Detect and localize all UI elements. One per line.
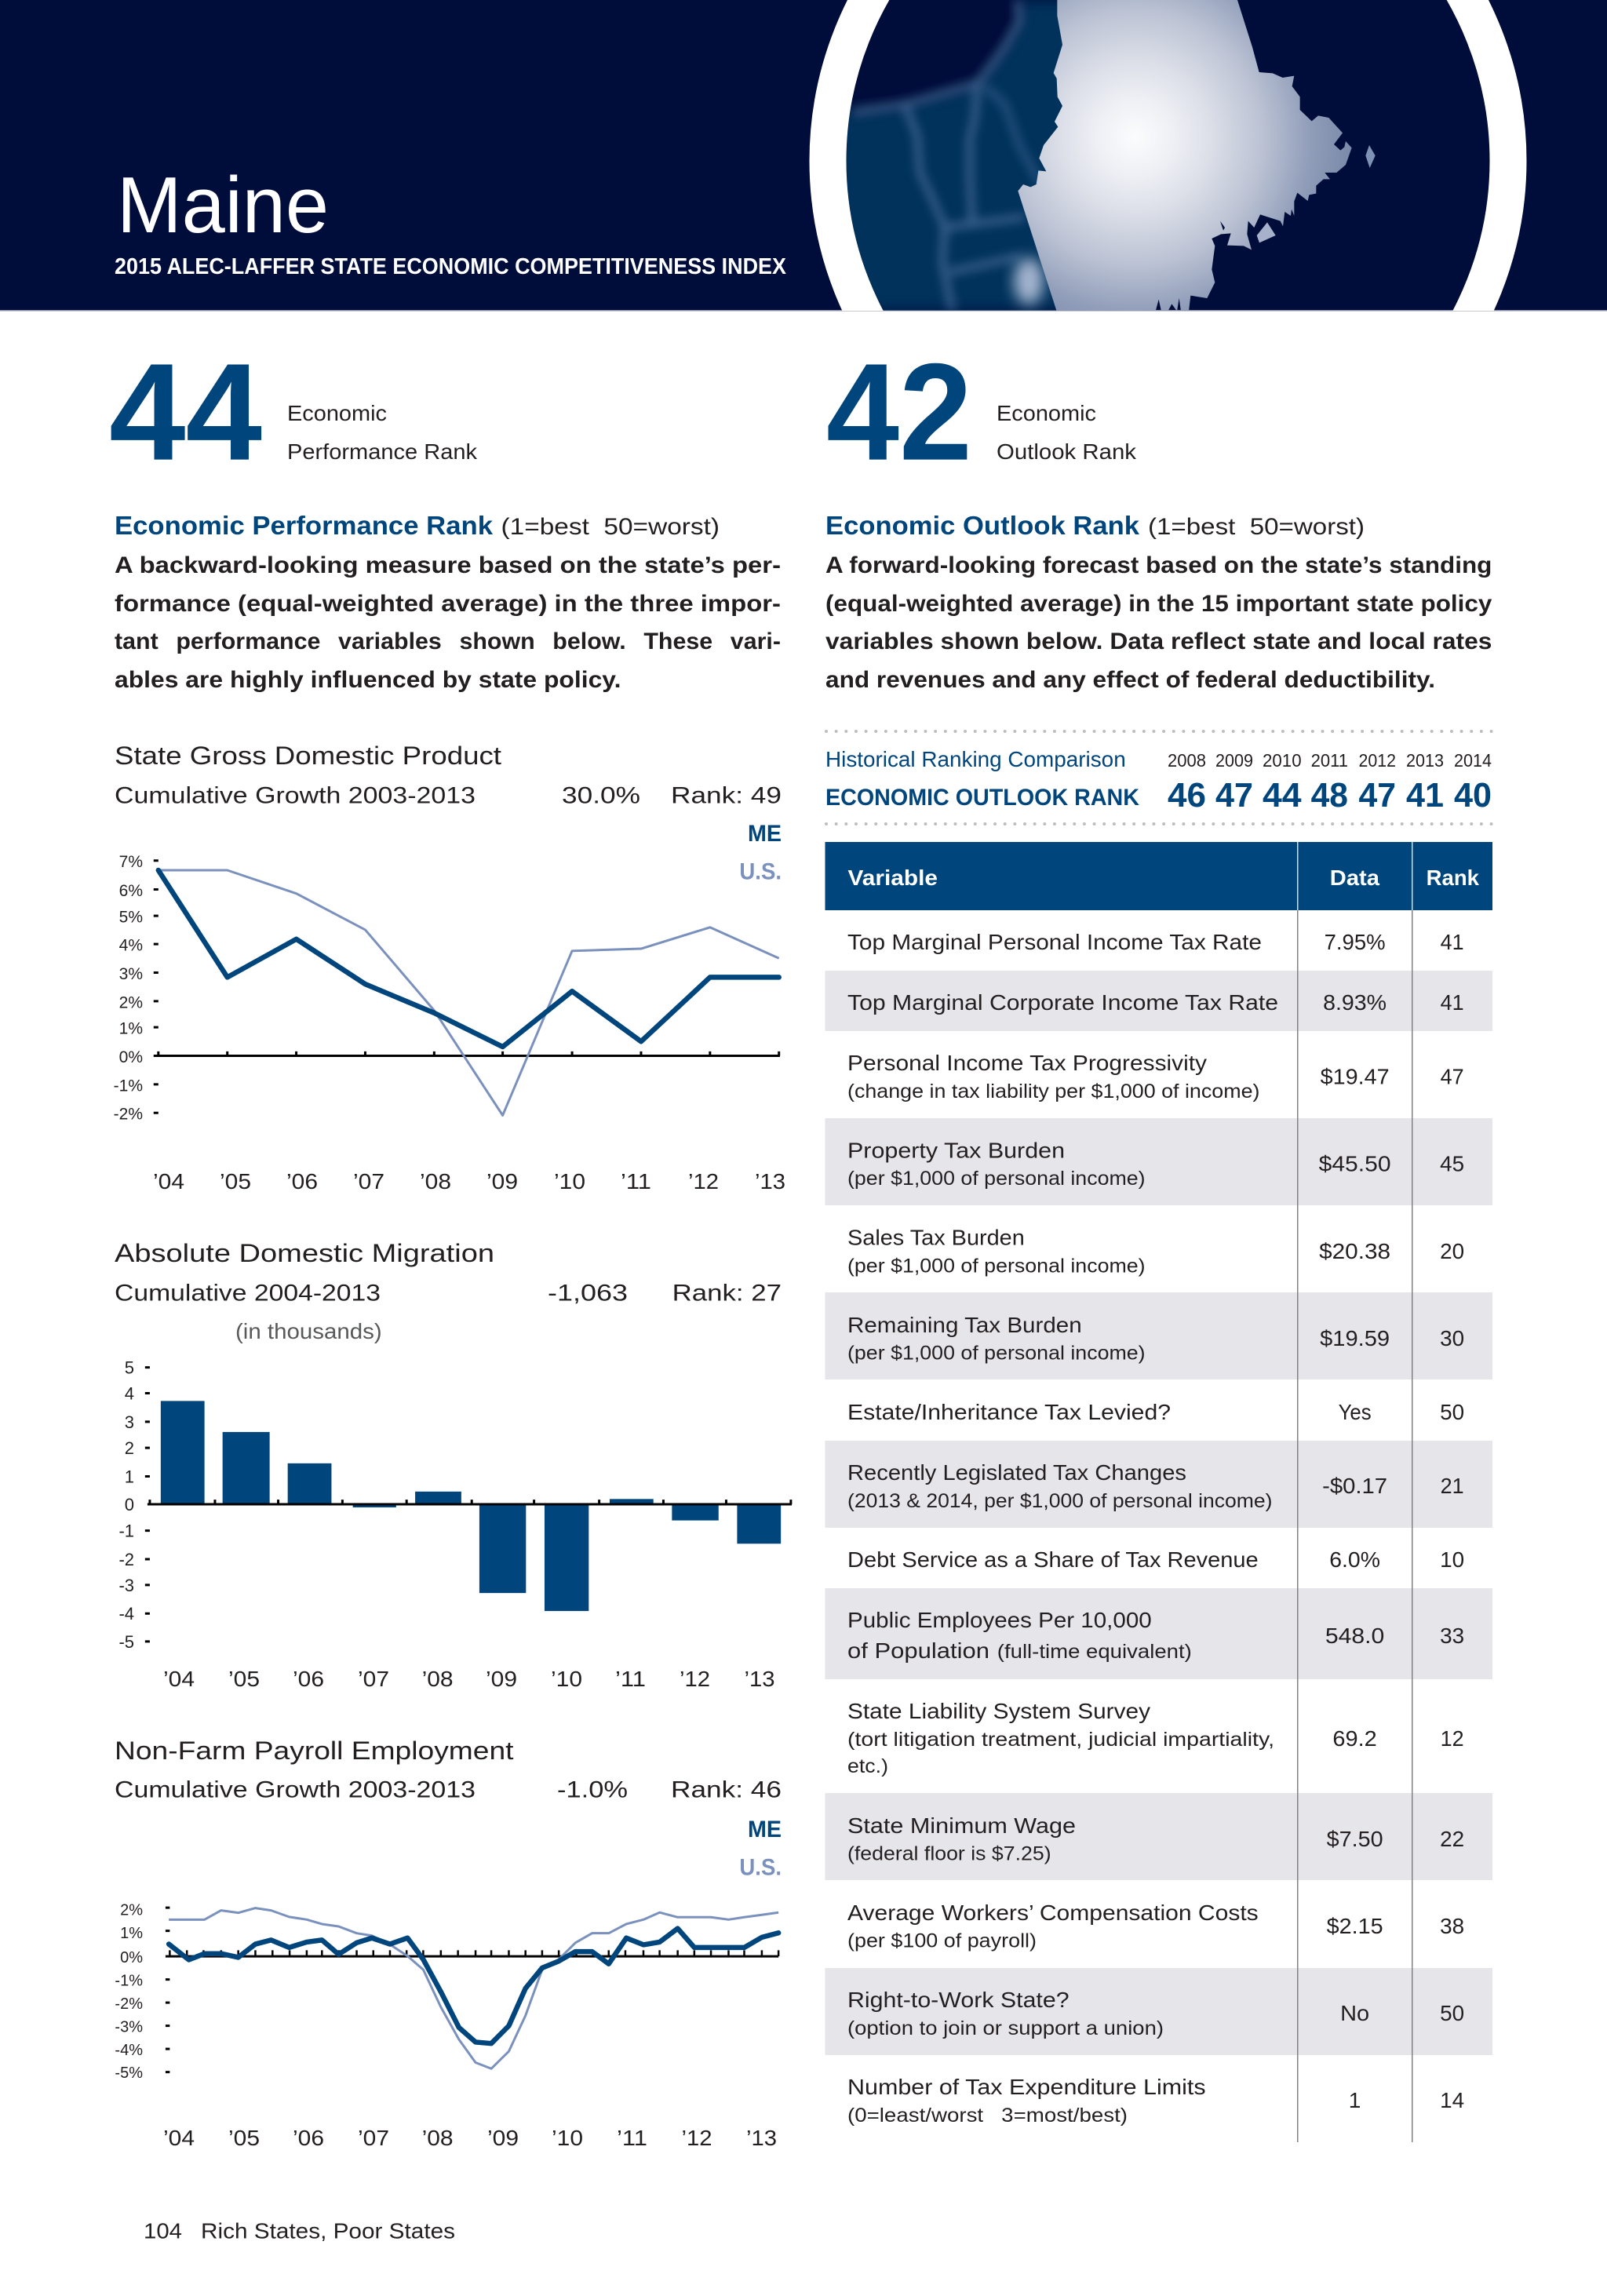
years: 2008 (1168, 750, 1206, 771)
bar chart: migration (118, 1358, 792, 1691)
chart heading: 30.0% (562, 783, 640, 808)
bar chart: migration: ’12 (680, 1667, 710, 1691)
row: debt service (847, 1547, 1464, 1572)
years: 2010 (1263, 750, 1302, 771)
bar chart: migration: -3 (118, 1576, 134, 1595)
big rank number 42: 42 (826, 336, 972, 490)
heading: (1=best 50=worst) (501, 514, 720, 540)
row: average workers' compensation costs: Average Workers’ Compensation Costs (847, 1901, 1259, 1925)
description: and revenues and any effect of federal deductibility. (825, 667, 1435, 693)
bar chart: migration: 2 (125, 1438, 134, 1458)
row: number of tax expenditure limits: (0=least/worst 3=most/best) (847, 2105, 1128, 2127)
row: state minimum wage (847, 1813, 1464, 1865)
bar chart: migration: ’08 (422, 1667, 454, 1691)
bar chart: migration: ’07 (358, 1667, 389, 1691)
row: top marginal corporate income tax rate (847, 990, 1464, 1015)
line chart: employment: ’08 (422, 2126, 454, 2150)
line chart: GDP growth: 4% (119, 937, 143, 954)
row: personal income tax progressivity: $19.47 (1321, 1065, 1390, 1089)
heading: Economic Performance Rank (115, 511, 494, 540)
row: personal income tax progressivity: Personal Income Tax Progressivity (847, 1051, 1207, 1075)
row: state liability system survey (847, 1699, 1464, 1777)
line chart: GDP growth: 6% (119, 882, 143, 900)
bar chart: migration: ’09 (486, 1667, 517, 1691)
row: top marginal personal income tax rate: 7.95% (1325, 930, 1386, 954)
line chart: employment: ’07 (358, 2126, 389, 2150)
row: top marginal personal income tax rate: Top Marginal Personal Income Tax Rate (847, 930, 1262, 954)
bar chart: migration: ’10 (551, 1667, 582, 1691)
title: Maine (117, 162, 329, 250)
row: number of tax expenditure limits: Number of Tax Expenditure Limits (847, 2075, 1206, 2099)
row: recently legislated tax changes: 21 (1441, 1474, 1464, 1498)
description: formance (equal-weighted average) in the three impor- (115, 591, 781, 617)
line chart: GDP growth: -1% (114, 1077, 143, 1095)
panel: non-farm payroll employment (115, 1737, 782, 2150)
table header: Variable (847, 866, 938, 890)
bar chart: migration: 4 (125, 1384, 134, 1403)
line chart: employment: ’13 (746, 2126, 777, 2150)
chart heading (115, 1737, 782, 1803)
line chart: GDP growth: ’11 (621, 1169, 651, 1194)
rank label (997, 401, 1137, 464)
table header (825, 842, 1492, 910)
heading (825, 511, 1365, 540)
panel: economic outlook rank (825, 336, 1492, 693)
bar chart: migration: ’04 (163, 1667, 195, 1691)
historical ranks: 47 (1215, 776, 1253, 815)
line chart: GDP growth: 0% (119, 1048, 143, 1066)
row: property tax burden: Property Tax Burden (847, 1139, 1065, 1163)
description: tant performance variables shown below. These vari- (115, 629, 781, 654)
historical ranks: 46 (1168, 776, 1206, 815)
legend: ME (748, 1817, 782, 1842)
historical ranks: 41 (1406, 776, 1444, 815)
line chart: GDP growth: ’09 (486, 1169, 518, 1194)
row: average workers' compensation costs: (per $100 of payroll) (847, 1930, 1037, 1952)
historical ranks: 44 (1263, 776, 1302, 815)
description: ables are highly influenced by state policy. (115, 667, 621, 693)
description (115, 552, 781, 693)
row: state liability system survey: (tort litigation treatment, judicial impartiality, (847, 1729, 1274, 1751)
bar chart: migration: 0 (125, 1495, 134, 1514)
line chart: employment: ’12 (681, 2126, 712, 2150)
row: sales tax burden (847, 1226, 1464, 1277)
row: top marginal personal income tax rate (847, 930, 1464, 954)
row: personal income tax progressivity: (change in tax liability per $1,000 of income) (847, 1081, 1260, 1102)
line chart: GDP growth: ’12 (688, 1169, 719, 1194)
chart heading: Rank: 46 (671, 1777, 782, 1803)
legend: U.S. (739, 1855, 782, 1880)
table: policy variables (825, 842, 1492, 2142)
footer page label: Rich States, Poor States (201, 2219, 455, 2243)
line chart: employment: ’05 (228, 2126, 260, 2150)
line chart: GDP growth: ’06 (286, 1169, 318, 1194)
row: average workers' compensation costs: 38 (1440, 1914, 1464, 1938)
chart heading: Absolute Domestic Migration (115, 1239, 494, 1267)
row: state liability system survey: State Liability System Survey (847, 1699, 1150, 1723)
description: variables shown below. Data reflect state and local rates (825, 629, 1492, 654)
row: number of tax expenditure limits: 14 (1440, 2088, 1464, 2112)
years: 2011 (1311, 750, 1348, 771)
line chart: GDP growth: ’13 (755, 1169, 785, 1194)
row: recently legislated tax changes (847, 1460, 1464, 1512)
row: sales tax burden: Sales Tax Burden (847, 1226, 1025, 1250)
historical ranks: 47 (1359, 776, 1396, 815)
row: right-to-work state: Right-to-Work State? (847, 1988, 1070, 2012)
row: right-to-work state: No (1340, 2001, 1369, 2025)
row: remaining tax burden: Remaining Tax Burden (847, 1313, 1082, 1337)
chart heading: State Gross Domestic Product (115, 742, 501, 770)
chart heading: Non-Farm Payroll Employment (115, 1737, 513, 1765)
row: state liability system survey: 69.2 (1332, 1726, 1377, 1751)
unit note: (in thousands) (235, 1319, 382, 1343)
row: public employees: 33 (1440, 1624, 1464, 1648)
legend: ME (748, 821, 782, 847)
line chart: employment: -1% (115, 1973, 143, 1990)
years: 2012 (1359, 750, 1396, 771)
line chart: GDP growth: 3% (119, 965, 143, 983)
rank label: Economic (997, 401, 1096, 425)
bar chart: migration: -2 (118, 1550, 134, 1569)
chart heading: Rank: 27 (672, 1281, 782, 1306)
chart heading (115, 742, 782, 808)
rank label: Outlook Rank (997, 439, 1137, 464)
row: right-to-work state (847, 1988, 1464, 2039)
historical ranks: 40 (1454, 776, 1492, 815)
bar chart: migration: -1 (118, 1521, 134, 1541)
line chart: employment: 2% (120, 1902, 143, 1919)
line chart: employment: 1% (120, 1925, 143, 1942)
table row backgrounds (825, 971, 1492, 2055)
line chart: employment: -5% (115, 2065, 143, 2082)
row: public employees: 548.0 (1325, 1624, 1384, 1648)
big rank number 44: 44 (109, 336, 262, 490)
row: number of tax expenditure limits (847, 2075, 1464, 2127)
chart heading: Cumulative 2004-2013 (115, 1281, 381, 1306)
line chart: employment: ’09 (487, 2126, 519, 2150)
row: debt service: 10 (1440, 1547, 1464, 1572)
legend (739, 821, 782, 885)
row: property tax burden: 45 (1440, 1152, 1464, 1176)
rank label (287, 401, 478, 464)
row: debt service: Debt Service as a Share of Tax Revenue (847, 1547, 1259, 1572)
row: property tax burden: (per $1,000 of personal income) (847, 1168, 1146, 1190)
heading: Economic Outlook Rank (825, 511, 1140, 540)
row: right-to-work state: 50 (1440, 2001, 1464, 2025)
row: top marginal corporate income tax rate: Top Marginal Corporate Income Tax Rate (847, 990, 1278, 1015)
panel: economic performance rank (109, 336, 781, 693)
description: (equal-weighted average) in the 15 important state policy (825, 591, 1492, 617)
map of Maine in a ring (810, 0, 1527, 311)
row: remaining tax burden: 30 (1440, 1326, 1464, 1350)
line chart: employment: -2% (115, 1995, 143, 2013)
table header: Rank (1427, 866, 1479, 890)
historical ranking comparison (825, 731, 1492, 824)
row: property tax burden (847, 1139, 1464, 1190)
line chart: GDP growth: 2% (119, 993, 143, 1012)
bar chart: migration: -5 (118, 1632, 134, 1652)
heading (115, 511, 720, 540)
row: average workers' compensation costs (847, 1901, 1464, 1952)
comparison label: Historical Ranking Comparison (825, 747, 1126, 771)
bar chart: migration: 1 (125, 1467, 134, 1486)
line chart: GDP growth: 1% (119, 1020, 143, 1037)
rank label: ECONOMIC OUTLOOK RANK (825, 785, 1139, 811)
years: 2013 (1406, 750, 1444, 771)
row: recently legislated tax changes: Recently Legislated Tax Changes (847, 1460, 1186, 1485)
row: property tax burden: $45.50 (1319, 1152, 1391, 1176)
years: 2009 (1215, 750, 1253, 771)
bar chart: migration: ’13 (744, 1667, 775, 1691)
rank label: Economic (287, 401, 387, 425)
chart heading: Cumulative Growth 2003-2013 (115, 1777, 476, 1803)
line chart: GDP growth: ’08 (420, 1169, 451, 1194)
row: public employees (847, 1608, 1464, 1663)
row: public employees: (full-time equivalent) (997, 1641, 1192, 1663)
row: top marginal corporate income tax rate: 8.93% (1323, 990, 1387, 1015)
line chart: GDP growth: -2% (114, 1105, 143, 1124)
row: recently legislated tax changes: (2013 & 2014, per $1,000 of personal income) (847, 1490, 1273, 1512)
row: state minimum wage: State Minimum Wage (847, 1813, 1076, 1838)
line chart: GDP growth: 5% (119, 909, 143, 926)
line chart: employment: ’11 (617, 2126, 647, 2150)
description (825, 552, 1492, 693)
historical ranks (1168, 776, 1492, 815)
row: top marginal personal income tax rate: 41 (1441, 930, 1464, 954)
chart heading: -1,063 (548, 1281, 628, 1306)
line chart: GDP growth: ’10 (554, 1169, 585, 1194)
row: number of tax expenditure limits: 1 (1349, 2088, 1361, 2112)
row: debt service: 6.0% (1329, 1547, 1380, 1572)
subtitle: 2015 ALEC-LAFFER STATE ECONOMIC COMPETITIVENESS INDEX (115, 254, 787, 279)
line chart: employment: ’04 (163, 2126, 195, 2150)
row: remaining tax burden: (per $1,000 of personal income) (847, 1343, 1146, 1365)
table header: Data (1330, 866, 1379, 890)
chart heading: Rank: 49 (671, 783, 782, 808)
chart heading: Cumulative Growth 2003-2013 (115, 783, 476, 808)
panel: absolute domestic migration (115, 1239, 792, 1691)
row: public employees: Public Employees Per 10,000 (847, 1608, 1152, 1632)
line chart: GDP growth: ’07 (353, 1169, 384, 1194)
row: estate/inheritance tax (847, 1400, 1464, 1424)
years: 2014 (1454, 750, 1492, 771)
line chart: employment (115, 1902, 778, 2150)
line chart: employment: ’06 (293, 2126, 324, 2150)
row: public employees: of Population (847, 1638, 989, 1663)
line chart: employment: ’10 (552, 2126, 583, 2150)
row: sales tax burden: $20.38 (1319, 1239, 1390, 1263)
panel: state gross domestic product (114, 742, 785, 1194)
line chart: employment: -3% (115, 2018, 143, 2035)
line chart: GDP growth: ’05 (220, 1169, 251, 1194)
row: remaining tax burden: $19.59 (1320, 1326, 1390, 1350)
row: estate/inheritance tax: 50 (1440, 1400, 1464, 1424)
description: A forward-looking forecast based on the state’s standing (825, 552, 1492, 578)
years (1168, 750, 1492, 771)
row: state minimum wage: 22 (1440, 1827, 1464, 1851)
row: average workers' compensation costs: $2.15 (1327, 1914, 1383, 1938)
chart heading (115, 1239, 782, 1306)
bar chart: migration: ’05 (228, 1667, 260, 1691)
rank label: Performance Rank (287, 439, 478, 464)
legend: U.S. (739, 858, 782, 885)
bar chart: migration: ’06 (293, 1667, 324, 1691)
heading: (1=best 50=worst) (1148, 514, 1365, 540)
footer page label: 104 (144, 2219, 182, 2243)
legend (739, 1817, 782, 1880)
row: remaining tax burden (847, 1313, 1464, 1365)
row: sales tax burden: 20 (1440, 1239, 1464, 1263)
row: recently legislated tax changes: -$0.17 (1322, 1474, 1387, 1498)
row: state minimum wage: (federal floor is $7.25) (847, 1843, 1051, 1865)
row: state minimum wage: $7.50 (1327, 1827, 1383, 1851)
line chart: GDP growth: ’04 (153, 1169, 184, 1194)
line chart: employment: -4% (115, 2042, 143, 2059)
row: estate/inheritance tax: Estate/Inheritance Tax Levied? (847, 1400, 1171, 1424)
bar chart: migration: 3 (125, 1412, 134, 1432)
row: personal income tax progressivity: 47 (1441, 1065, 1464, 1089)
row: sales tax burden: (per $1,000 of personal income) (847, 1256, 1146, 1277)
row: estate/inheritance tax: Yes (1339, 1400, 1372, 1424)
row: state liability system survey: 12 (1441, 1726, 1464, 1751)
bar chart: migration: 5 (125, 1358, 134, 1378)
line chart: GDP growth (114, 853, 785, 1194)
row: top marginal corporate income tax rate: 41 (1441, 990, 1464, 1015)
description: A backward-looking measure based on the state’s per- (115, 552, 781, 578)
line chart: GDP growth: 7% (119, 853, 143, 871)
row: state liability system survey: etc.) (847, 1755, 888, 1777)
row: right-to-work state: (option to join or support a union) (847, 2017, 1164, 2039)
historical ranks: 48 (1311, 776, 1348, 815)
bar chart: migration: ’11 (615, 1667, 646, 1691)
chart heading: -1.0% (557, 1777, 628, 1803)
row: personal income tax progressivity (847, 1051, 1464, 1102)
line chart: employment: 0% (120, 1949, 143, 1966)
bar chart: migration: -4 (118, 1604, 134, 1624)
header banner (0, 0, 1607, 311)
